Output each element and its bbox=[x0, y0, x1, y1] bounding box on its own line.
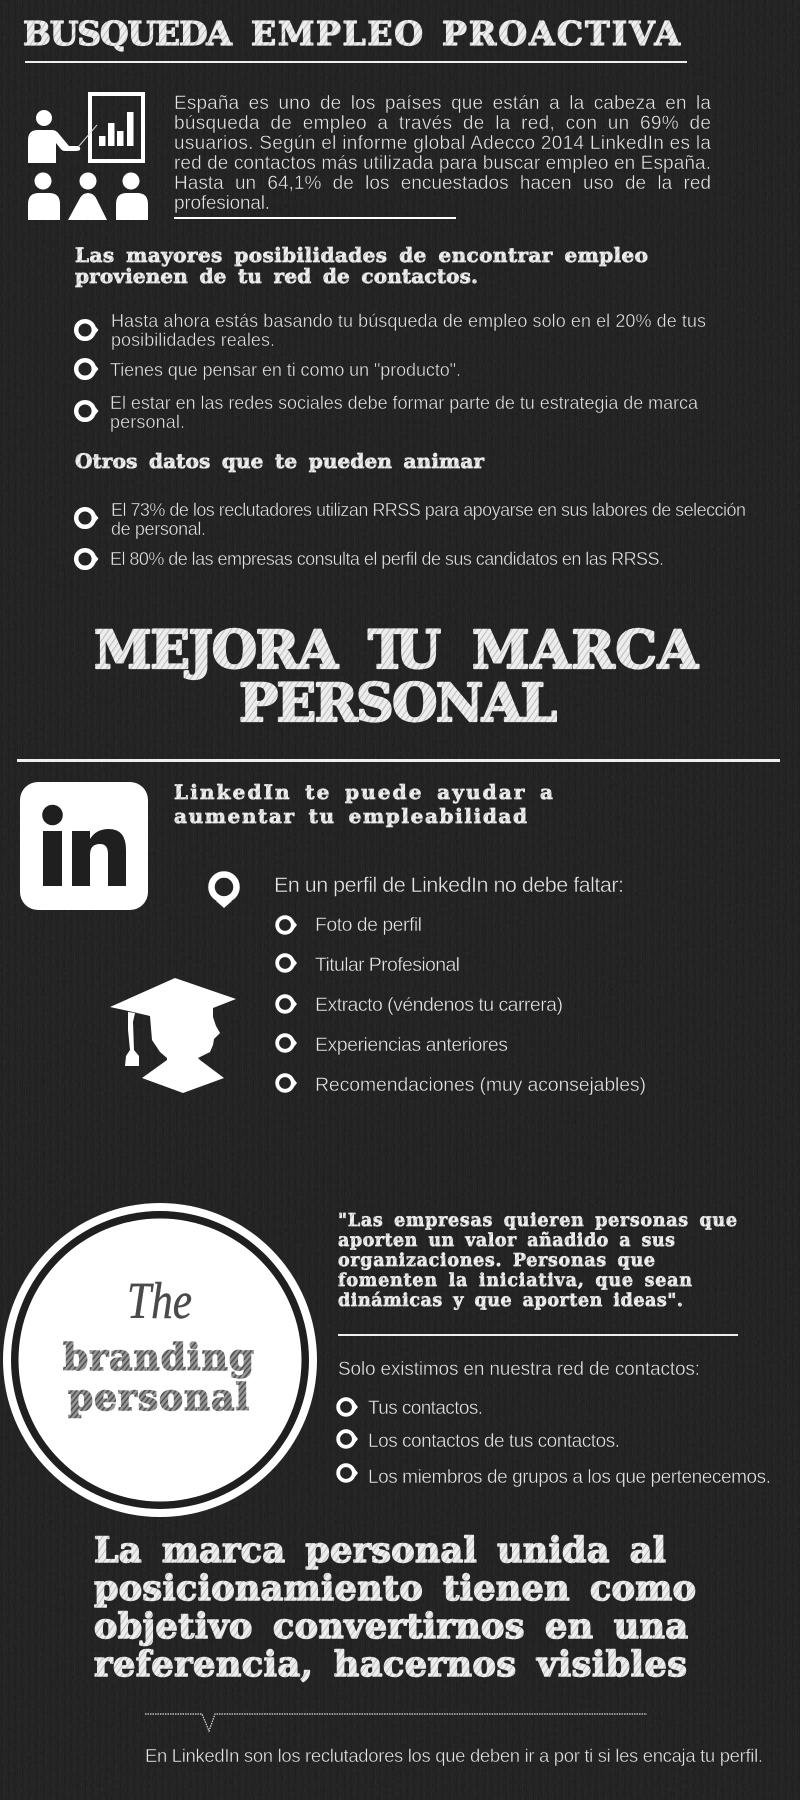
intro paragraph: red de contactos más utilizada para buscar empleo en España. bbox=[174, 153, 711, 174]
bullet: 73% bbox=[76, 500, 746, 539]
bullet: 20% bbox=[76, 311, 706, 350]
subheading: linkedin empleabilidad: LinkedIn te puede ayudar a bbox=[174, 780, 553, 804]
heading: mejora tu marca personal: PERSONAL bbox=[239, 673, 557, 734]
title: busqueda empleo proactiva: PROACTIVA bbox=[442, 14, 680, 53]
bullet: 73%: de personal. bbox=[111, 519, 206, 539]
bullet: 73%: El 73% de los reclutadores utilizan RRSS para apoyarse en sus labores de selección bbox=[111, 500, 746, 520]
heading: mejora tu marca personal: MARCA bbox=[472, 620, 699, 681]
icon: location pin bbox=[212, 874, 236, 908]
icon: graduate silhouette bbox=[110, 978, 236, 1093]
bullet list: datos bbox=[76, 500, 746, 569]
bullet: redes sociales bbox=[76, 393, 699, 432]
statement: marca personal bbox=[94, 1530, 696, 1685]
item: titular: Titular Profesional bbox=[315, 954, 460, 976]
statement: marca personal: La marca personal unida al bbox=[94, 1530, 666, 1571]
badge: the branding personal bbox=[3, 1203, 317, 1517]
intro paragraph: usuarios. Según el informe global Adecco 2014 LinkedIn es la bbox=[174, 133, 711, 154]
bullet: producto: Tienes que pensar en ti como un "producto". bbox=[110, 360, 461, 380]
statement: marca personal: objetivo convertirnos en una bbox=[94, 1606, 688, 1647]
quote bbox=[338, 1211, 737, 1311]
subheading: linkedin empleabilidad: aumentar tu empleabilidad bbox=[174, 804, 527, 828]
bullet: tus contactos: Tus contactos. bbox=[368, 1398, 483, 1419]
item: experiencias: Experiencias anteriores bbox=[315, 1034, 508, 1056]
statement: marca personal: referencia, hacernos visibles bbox=[94, 1644, 687, 1685]
title: busqueda empleo proactiva bbox=[23, 14, 680, 53]
quote: fomenten la iniciativa, que sean bbox=[338, 1271, 692, 1291]
badge: the branding personal: personal bbox=[68, 1377, 249, 1419]
subheading: otros datos: Otros datos que te pueden animar bbox=[75, 449, 484, 473]
subheading: linkedin empleabilidad bbox=[174, 780, 553, 828]
quote: aporten un valor añadido a sus bbox=[338, 1231, 675, 1251]
item: recomendaciones: Recomendaciones (muy aconsejables) bbox=[315, 1074, 646, 1096]
checklist: perfil bbox=[277, 914, 646, 1096]
intro paragraph: Hasta un 64,1% de los encuestados hacen uso de la red bbox=[174, 173, 711, 194]
heading: mejora tu marca personal bbox=[94, 620, 699, 734]
intro paragraph: España es uno de los países que están a la cabeza en la bbox=[174, 93, 711, 114]
subheading: red de contactos: Las mayores posibilidades de encontrar empleo bbox=[75, 243, 648, 267]
intro paragraph: profesional. bbox=[174, 193, 270, 214]
heading: mejora tu marca personal: TU bbox=[368, 620, 441, 681]
quote: organizaciones. Personas que bbox=[338, 1251, 655, 1271]
bullet: grupos: Los miembros de grupos a los que pertenecemos. bbox=[368, 1467, 771, 1488]
quote: dinámicas y que aporten ideas". bbox=[338, 1291, 683, 1311]
subheading: red de contactos: provienen de tu red de contactos. bbox=[75, 264, 478, 288]
item: extracto: Extracto (véndenos tu carrera) bbox=[315, 994, 563, 1016]
item: foto: Foto de perfil bbox=[315, 914, 422, 936]
text: solo existimos: Solo existimos en nuestra red de contactos: bbox=[338, 1359, 700, 1380]
bullet: redes sociales: El estar en las redes sociales debe formar parte de tu estrategia de marca bbox=[110, 393, 699, 413]
intro paragraph: búsqueda de empleo a través de la red, con un 69% de bbox=[174, 113, 711, 134]
statement: marca personal: posicionamiento tienen como bbox=[94, 1568, 696, 1609]
list intro: perfil de linkedin: En un perfil de LinkedIn no debe faltar: bbox=[274, 873, 624, 897]
bullet: redes sociales: personal. bbox=[110, 412, 185, 432]
badge: the branding personal: The bbox=[127, 1273, 192, 1330]
speech line: dotted callout bbox=[145, 1714, 647, 1731]
icon: presenter with chart and audience bbox=[28, 94, 148, 220]
heading: mejora tu marca personal: MEJORA bbox=[94, 620, 339, 681]
bullet list: contactos bbox=[338, 1398, 771, 1488]
bullet: 20%: Hasta ahora estás basando tu búsqueda de empleo solo en el 20% de tus bbox=[111, 311, 706, 331]
title: busqueda empleo proactiva: BUSQUEDA bbox=[23, 14, 232, 53]
quote: "Las empresas quieren personas que bbox=[338, 1211, 737, 1231]
intro paragraph bbox=[174, 93, 711, 214]
bullet list: posibilidades bbox=[76, 311, 706, 432]
icon: linkedin bbox=[20, 782, 148, 910]
bullet: 80%: El 80% de las empresas consulta el perfil de sus candidatos en las RRSS. bbox=[110, 549, 664, 569]
bullet: 20%: posibilidades reales. bbox=[111, 330, 275, 350]
bullet: contactos de contactos: Los contactos de tus contactos. bbox=[368, 1431, 620, 1452]
subheading: red de contactos bbox=[75, 243, 648, 288]
badge: the branding personal: branding bbox=[63, 1337, 254, 1379]
title: busqueda empleo proactiva: EMPLEO bbox=[251, 14, 423, 53]
closing text: En LinkedIn son los reclutadores los que deben ir a por ti si les encaja tu perfil. bbox=[145, 1745, 763, 1766]
